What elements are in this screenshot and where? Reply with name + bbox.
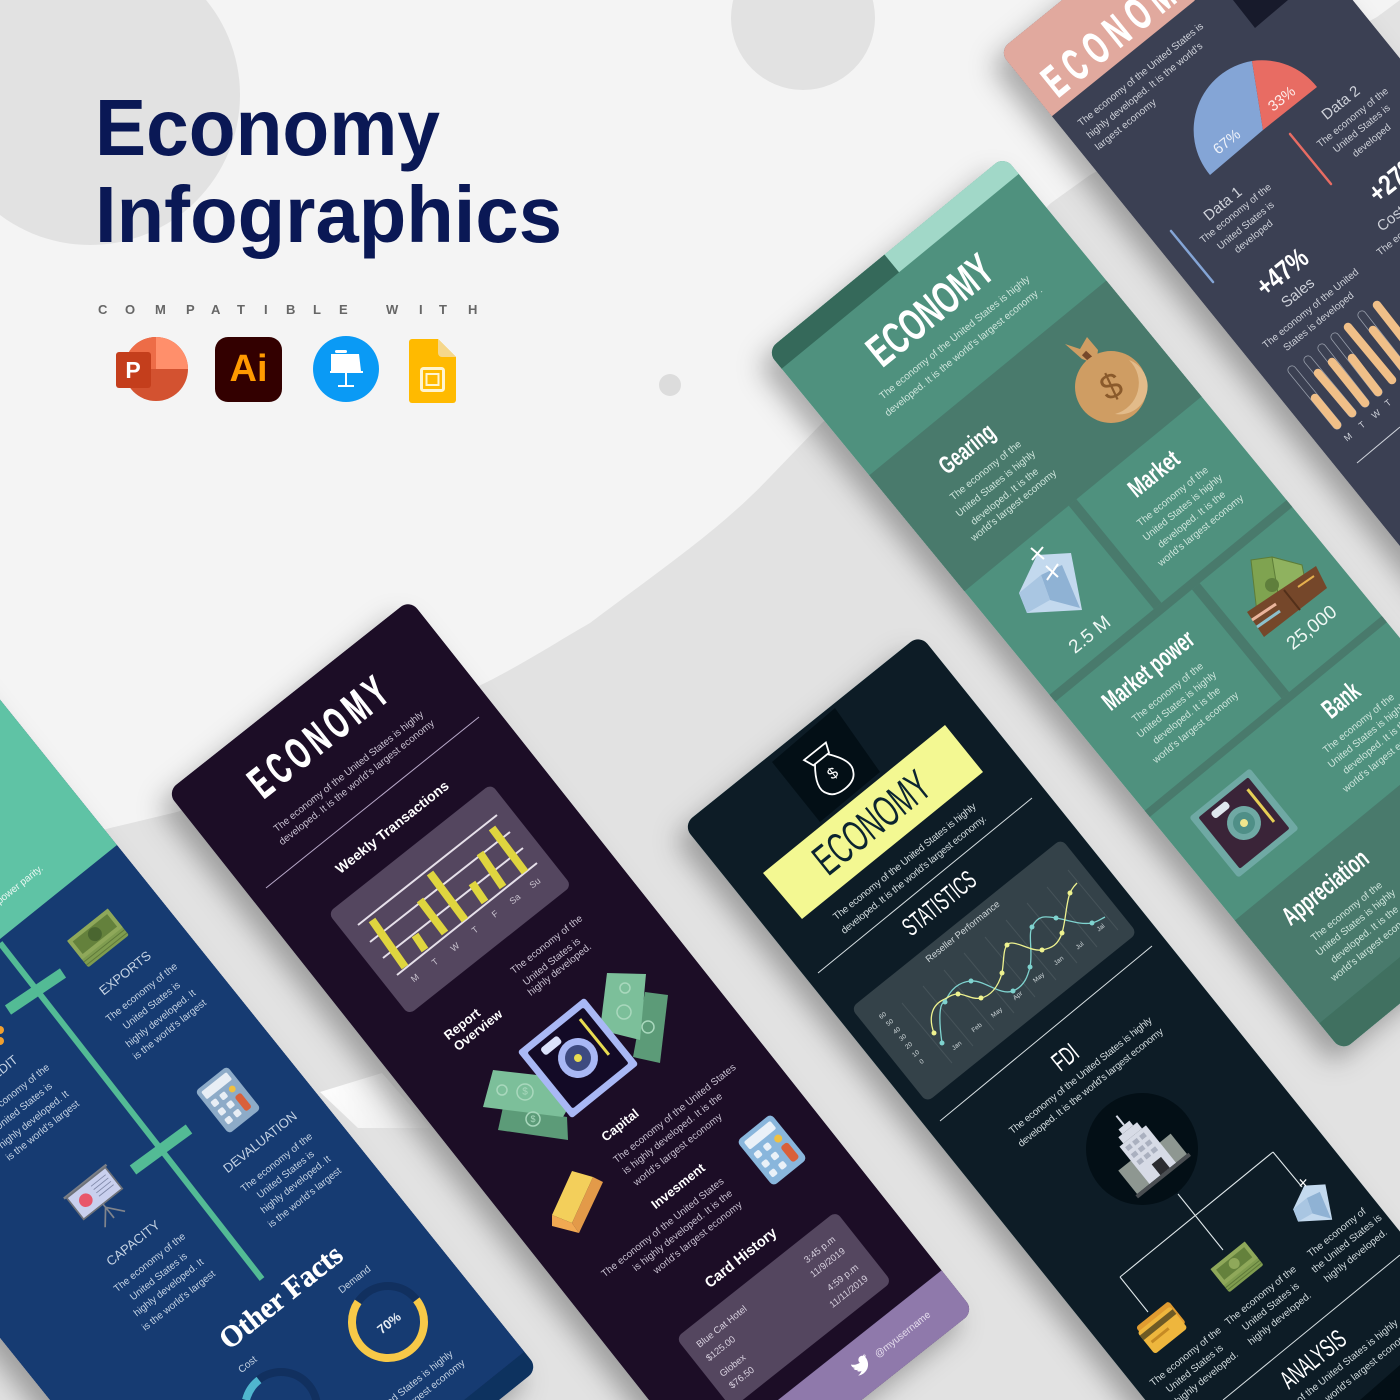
demand donut: Demand [337,1264,373,1296]
twitter handle: @myusername [873,1309,933,1360]
green intro text: The economy of the United States is highly [878,274,1032,402]
exports block: EXPORTS [96,948,154,998]
market power block [1096,624,1241,767]
sales stat: States is developed [1282,290,1356,354]
FDI text: developed. It is the world's largest economy [1016,1026,1166,1150]
card history panel: 3:45 p.m [802,1234,838,1266]
slate intro text: largest economy [1093,97,1159,153]
capacity block: is the world's largest [140,1268,218,1333]
cost donut [237,1354,317,1400]
capacity block: United States is [128,1251,190,1303]
market block: world's largest economy [1155,493,1246,570]
slate header notch [1233,0,1288,28]
data 2 text: developed [1351,122,1393,160]
icon: credit card [1134,1301,1189,1354]
card history panel: 11/11/2019 [828,1273,870,1311]
green heading: ECONOMY [856,244,1004,376]
icon: safe purple [518,998,638,1118]
capital block: The economy of the United States [612,1062,738,1166]
icon: outline money bag: $ [824,764,842,783]
panel: purple card [167,599,974,1400]
sales stat: The economy of the United [1261,267,1361,351]
yellow banner [763,725,983,919]
pill chart labels: T [1383,397,1394,409]
text: diamond: the United States is [1310,1213,1384,1275]
credit block [0,1052,82,1163]
data 1 text: developed [1233,218,1275,256]
bar chart panel [328,784,572,1015]
line chart panel: 50 [885,1018,895,1028]
slate intro text: highly developed. It is the world's [1085,41,1205,141]
line chart panel: 0 [918,1058,926,1066]
analysis heading: ANALYSIS [1274,1323,1352,1395]
text: cash: United States is [1240,1281,1302,1333]
report overview text: The economy of the [509,913,585,977]
stat 2.5 M: 2.5 M [1065,612,1115,658]
pill chart labels: T [1357,419,1368,431]
appreciation block: The economy of the [1309,880,1385,944]
purple intro text: developed. It is the world's largest economy [277,718,437,848]
gearing block: The economy of the [948,439,1024,503]
icon: money bag: $ [1093,363,1129,409]
devaluation block: DEVALUATION [220,1108,300,1176]
devaluation block [220,1108,344,1230]
text: diamond: highly developed. [1322,1227,1390,1285]
bar chart panel: Su [528,876,542,890]
exports block: is the world's largest [131,997,209,1062]
data 1 text: The economy of the [1198,182,1274,246]
capacity block: CAPACITY [103,1217,163,1269]
exports block: United States is [121,980,183,1032]
icon: powerpoint [116,337,188,401]
line chart panel [851,839,1137,1102]
line chart panel: 10 [911,1049,921,1059]
dark header strip [772,708,880,822]
pill chart labels: M [1342,431,1354,443]
devaluation block: The economy of the [239,1131,315,1195]
market block [1123,445,1246,570]
data 2 text: United States is [1331,103,1393,155]
text: card [1148,1325,1241,1400]
capital block: is highly developed. It is the [621,1091,725,1177]
text: card: The economy of the [1148,1325,1224,1389]
icon: banknotes: $ [522,1086,528,1098]
market block: developed. It is the [1156,489,1228,551]
weekly transactions heading: Weekly Transactions [332,777,452,877]
pie chart: 33% [1265,83,1299,115]
card history panel: $76.50 [727,1365,757,1391]
capacity block: The economy of the [112,1231,188,1295]
line chart panel: May [1032,971,1047,985]
purple intro text: The economy of the United States is highly [272,709,426,835]
gearing block: world's largest economy [968,468,1059,545]
icon: calculator navy [195,1066,261,1134]
bank block: The economy of the [1321,692,1397,756]
line chart panel: 60 [878,1011,888,1021]
compatible with label: COMPATIBLE WITH [98,302,477,317]
line chart panel: 40 [892,1026,902,1036]
market power block: world's largest economy [1150,690,1241,767]
pill bar chart [1292,305,1400,425]
exports block: The economy of the [104,961,180,1025]
icon: safe green [1189,768,1299,878]
icon: google slides [409,339,456,403]
FDI text: The economy of the United States is highly [1007,1015,1155,1137]
other facts heading: Other Facts [213,1238,349,1356]
slate intro text: The economy of the United States is [1076,21,1206,129]
investment block: world's largest economy [651,1200,745,1277]
dark intro text: developed. It is the world's largest economy. [839,813,989,937]
title: Infographics [95,170,562,259]
cost donut: Cost [237,1354,260,1376]
icon: wallet [1247,557,1327,637]
investment block: The economy of the United States [600,1176,726,1280]
market block: United States is highly [1141,473,1225,543]
stat 25,000: 25,000 [1283,602,1341,654]
icon: building [1086,1093,1198,1205]
market power block: United States is highly [1135,670,1219,740]
demand donut: 70% [374,1309,404,1337]
yellow banner: ECONOMY [804,761,940,885]
purple heading: ECONOMY [238,667,398,807]
data 2 text: Data 2 [1318,82,1364,124]
card history panel: 11/9/2019 [808,1246,848,1280]
icon: illustrator [215,337,282,402]
icon: exports cash [67,909,129,967]
line chart panel: 30 [898,1033,908,1043]
dark intro text: The economy of the United States is highly [831,801,979,923]
market power block: Market power [1096,624,1200,716]
card history panel: Globex [718,1352,748,1380]
pie chart: 67% [1210,126,1244,158]
icon: powerpoint: P [125,357,141,383]
devaluation block: United States is [255,1149,317,1201]
gearing block: developed. It is the [969,466,1041,528]
sales stat: Sales [1278,275,1318,311]
icon: diamond [1019,547,1082,613]
gearing block [933,418,1059,545]
gearing block: Gearing [933,418,1001,480]
panel: slate card [983,0,1400,595]
appreciation block: United States is highly [1314,888,1398,958]
icon: keynote [313,336,379,402]
credit block: is the world's largest [4,1098,82,1163]
bar chart panel: W [449,940,462,954]
sales stat [1250,242,1361,354]
capacity block [103,1217,218,1333]
bar chart panel: T [470,924,481,936]
data 2 text: The economy of the [1315,86,1391,150]
line chart panel: 20 [904,1041,914,1051]
exports block: highly developed. It [124,988,198,1050]
card history panel: 4:59 p.m [825,1262,861,1294]
market power block: The economy of the [1130,661,1206,725]
pill chart labels [1342,397,1394,443]
icon: presentation board [63,1164,136,1236]
market block: The economy of the [1135,465,1211,529]
card history panel: Blue Cat Hotel [695,1304,749,1350]
report overview text: highly developed. [526,942,594,998]
data 1 text: United States is [1215,200,1277,252]
devaluation block: is the world's largest [266,1165,344,1230]
bank block [1316,675,1400,796]
line chart panel: Apr [1012,990,1025,1002]
connector lines [1120,1152,1302,1312]
text: cash: The economy of the [1223,1264,1299,1328]
appreciation block [1276,843,1400,985]
line chart panel: Jan [951,1040,964,1052]
capital block: world's largest economy [631,1112,725,1189]
sales stat: +47% [1250,242,1314,302]
green intro text: developed. It is the world's largest economy . [883,285,1045,419]
cost stat [1362,148,1400,258]
market block: Market [1123,445,1186,503]
title [95,83,562,259]
title: Economy [95,83,440,172]
icon: coins [0,1026,4,1045]
line chart panel: Feb [970,1022,984,1034]
report overview text: United States is [521,936,583,988]
icon: banknotes [483,973,668,1140]
icon: cash stack [1210,1242,1264,1292]
statistics heading: STATISTICS [896,864,982,942]
capacity block: highly developed. It [132,1257,206,1319]
card history heading: Card History [702,1224,781,1292]
bar chart panel: T [430,956,441,968]
bar chart panel: Sa [508,892,522,906]
bank block: Bank [1316,675,1366,724]
gearing block: United States is highly [954,449,1038,519]
capital block: Capital [598,1106,642,1144]
investment block: Invesment [648,1160,708,1212]
report overview text [509,913,594,998]
market power block: developed. It is the [1151,685,1223,747]
icon: twitter [849,1353,874,1377]
bar chart panel: M [409,972,421,984]
FDI heading: FDI [1045,1037,1085,1077]
appreciation block: developed. It is the [1329,904,1400,966]
bar chart panel: F [490,908,501,920]
icon: money bag [1065,337,1148,423]
timeline [0,943,262,1279]
panel: navy card [0,700,534,1400]
panel: green card [767,156,1400,1051]
report overview heading: Report [441,1005,484,1043]
exports block [96,948,209,1062]
text: diamond: The economy of [1306,1206,1369,1260]
icon: calculator purple [737,1114,807,1186]
line chart panel: Reseller Performance [924,899,1002,965]
panel: dark teal card [683,635,1400,1400]
icon: outline money bag [800,739,860,801]
line chart panel: May [990,1006,1005,1020]
icon: illustrator: Ai [230,348,268,390]
card history panel: $125.00 [704,1334,738,1364]
report overview heading: Overview [451,1006,506,1054]
investment block: is highly developed. It is the [631,1188,735,1274]
data marker lines [1171,134,1331,282]
pill chart labels: W [1370,407,1383,421]
data 1 text: Data 1 [1200,183,1246,225]
icon: gold bar [552,1171,603,1233]
line chart panel: Jul [1075,940,1086,951]
line chart panel: Jan [1053,955,1066,967]
line chart panel: Jal [1096,922,1107,933]
text: cash: highly developed. [1246,1290,1314,1348]
card history panel [676,1211,892,1400]
demand donut [337,1264,439,1373]
devaluation block: highly developed. It [259,1154,333,1216]
text: card: United States is [1164,1343,1226,1395]
pie chart [1194,60,1317,175]
icon: banknotes: $ [530,1114,536,1124]
icon: small diamond [1293,1179,1332,1222]
text: cash [1223,1264,1314,1348]
